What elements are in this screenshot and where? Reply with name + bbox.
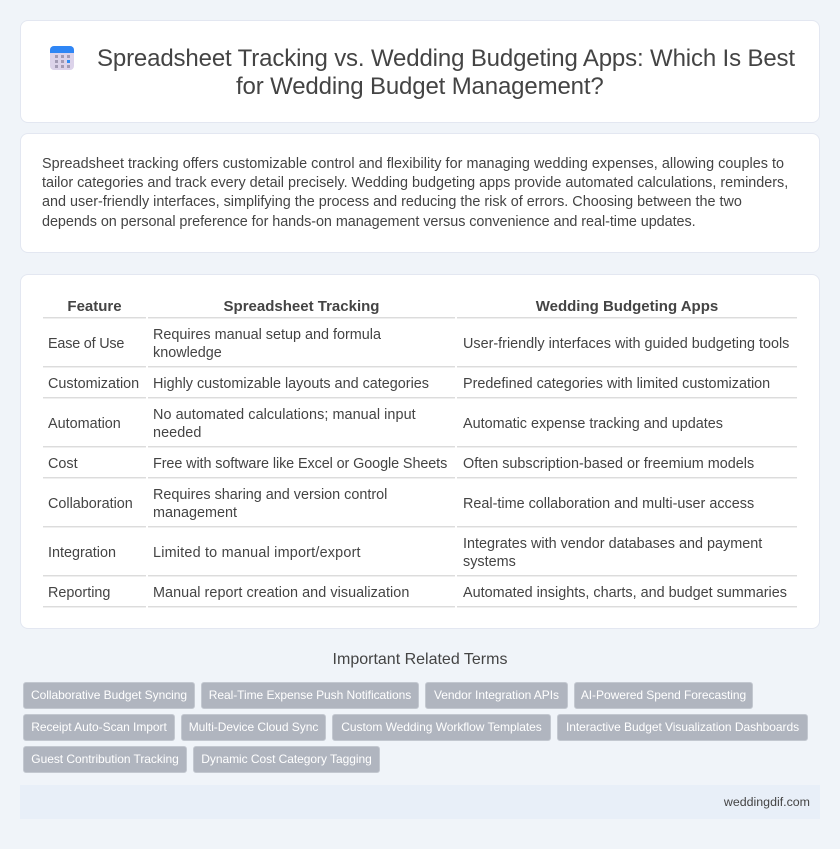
column header: Wedding Budgeting Apps: Wedding Budgeting Apps	[536, 298, 718, 315]
comparison table: Requires sharing and version control	[153, 487, 387, 503]
tag: Multi-Device Cloud Sync	[189, 720, 318, 734]
tag	[557, 714, 808, 741]
tag: Collaborative Budget Syncing	[31, 688, 187, 702]
comparison table: systems	[463, 554, 516, 570]
icon: calendar	[50, 46, 74, 70]
tag	[193, 746, 380, 773]
comparison table: knowledge	[153, 345, 222, 361]
tag: Dynamic Cost Category Tagging	[201, 752, 372, 766]
comparison table: Requires manual setup and formula	[153, 327, 381, 343]
tag	[574, 682, 753, 709]
tag: Real-Time Expense Push Notifications	[209, 688, 411, 702]
comparison table: User-friendly interfaces with guided budgeting tools	[463, 336, 789, 352]
row: Customization: Customization	[48, 376, 139, 392]
comparison table: Integrates with vendor databases and payment	[463, 536, 762, 552]
tag: Vendor Integration APIs	[434, 688, 559, 702]
text block: description: depends on personal preference for hands-on management versus convenience and real-time updates.	[42, 214, 696, 230]
row: Integration: Integration	[48, 545, 116, 561]
comparison table: Often subscription-based or freemium models	[463, 456, 754, 472]
title: for Wedding Budget Management?	[236, 73, 604, 100]
row: Collaboration: Collaboration	[48, 496, 133, 512]
panel: comparison table card	[20, 274, 820, 629]
comparison table: Predefined categories with limited customization	[463, 376, 770, 392]
comparison table: Real-time collaboration and multi-user access	[463, 496, 754, 512]
comparison table: Automated insights, charts, and budget summaries	[463, 585, 787, 601]
title: Spreadsheet Tracking vs. Wedding Budgeting Apps: Which Is Best	[97, 45, 795, 72]
tags: related terms	[23, 682, 808, 773]
comparison table: No automated calculations; manual input	[153, 407, 416, 423]
comparison table: Manual report creation and visualization	[153, 585, 409, 601]
tag: Receipt Auto-Scan Import	[31, 720, 167, 734]
tag	[23, 746, 187, 773]
tag	[23, 714, 175, 741]
tag: Guest Contribution Tracking	[31, 752, 179, 766]
row: Automation: Automation	[48, 416, 121, 432]
panel: title card	[20, 20, 820, 123]
title	[97, 45, 795, 100]
panel: description card	[20, 133, 820, 253]
text block: description: tailor categories and track every detail precisely. Wedding budgeting apps provide automated calculations, reminders,	[42, 175, 788, 191]
text block: description: and user-friendly interfaces, simplifying the process and reducing the risk of errors. Choosing between the two	[42, 194, 742, 210]
row: Cost: Cost	[48, 456, 78, 472]
tag: AI-Powered Spend Forecasting	[581, 688, 746, 702]
row: Reporting: Reporting	[48, 585, 110, 601]
tag	[425, 682, 568, 709]
column header: Feature: Feature	[67, 298, 122, 315]
comparison table: Highly customizable layouts and categories	[153, 376, 429, 392]
text block: description: Spreadsheet tracking offers customizable control and flexibility for managing wedding expenses, allowing couples to	[42, 156, 784, 172]
tag	[181, 714, 326, 741]
row: Ease of Use: Ease of Use	[48, 336, 124, 352]
comparison table: Limited to manual import/export	[153, 545, 361, 561]
tag	[23, 682, 195, 709]
heading: related terms: Important Related Terms	[333, 651, 507, 668]
tag: Custom Wedding Workflow Templates	[341, 720, 542, 734]
comparison table: Automatic expense tracking and updates	[463, 416, 723, 432]
text block: description	[42, 156, 788, 230]
tag: Interactive Budget Visualization Dashboards	[566, 720, 799, 734]
comparison table: needed	[153, 425, 201, 441]
footer bar	[20, 785, 820, 819]
comparison table	[43, 298, 797, 608]
tag	[201, 682, 419, 709]
column header: Spreadsheet Tracking: Spreadsheet Tracking	[224, 298, 379, 315]
footer text: weddingdif.com	[724, 795, 810, 809]
tag	[332, 714, 551, 741]
comparison table: Free with software like Excel or Google Sheets	[153, 456, 447, 472]
comparison table: management	[153, 505, 237, 521]
